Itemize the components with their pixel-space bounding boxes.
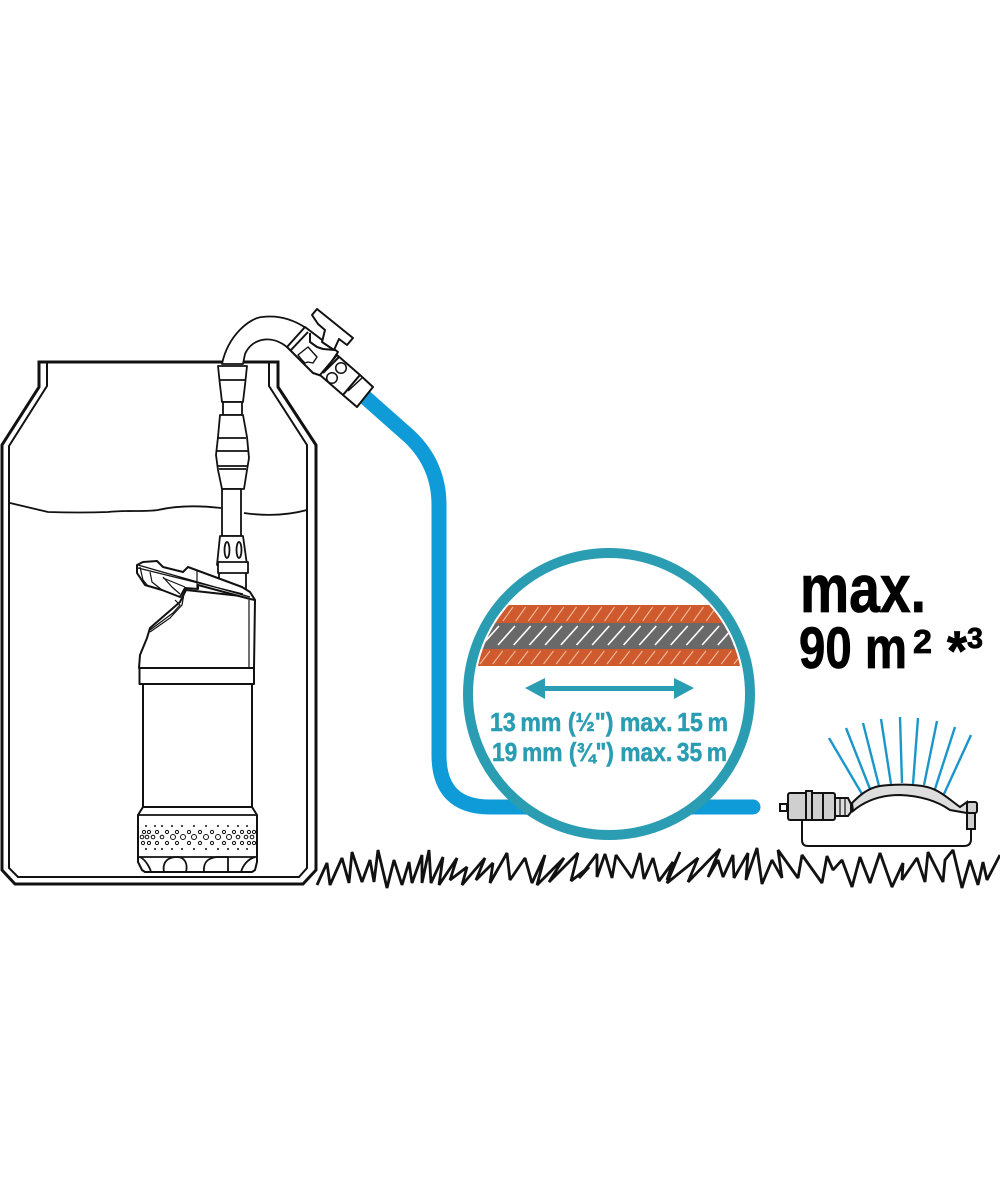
water surface (10, 503, 307, 515)
valve (287, 309, 373, 407)
pump lid (137, 561, 255, 600)
max coverage label: 3 (967, 623, 983, 655)
hose (366, 398, 753, 807)
sprinkler (780, 717, 977, 846)
pump base (138, 807, 257, 872)
length arrow (525, 678, 694, 699)
intake holes (145, 825, 248, 850)
hose length text: 13 mm (½") max. 15 m (490, 707, 728, 737)
max coverage label: max. (800, 551, 926, 627)
max coverage label: 2 (913, 623, 932, 660)
magnifier circle (460, 553, 760, 835)
coupling (780, 791, 977, 829)
pump head (139, 590, 255, 668)
grass (317, 848, 1000, 888)
max coverage label: * (947, 619, 967, 682)
pump (137, 561, 257, 872)
water jets (829, 717, 971, 794)
max coverage label: 90 m (799, 616, 907, 681)
max coverage label (799, 551, 983, 682)
magnifier circle: 19 mm (¾") max. 35 m (492, 737, 727, 767)
pump collar (140, 668, 254, 684)
tank (2, 362, 316, 884)
sprinkler arm (852, 785, 967, 813)
hose cross-section (478, 605, 740, 666)
pump body (143, 684, 252, 807)
support frame (802, 820, 971, 846)
pipe and elbow (216, 316, 306, 590)
